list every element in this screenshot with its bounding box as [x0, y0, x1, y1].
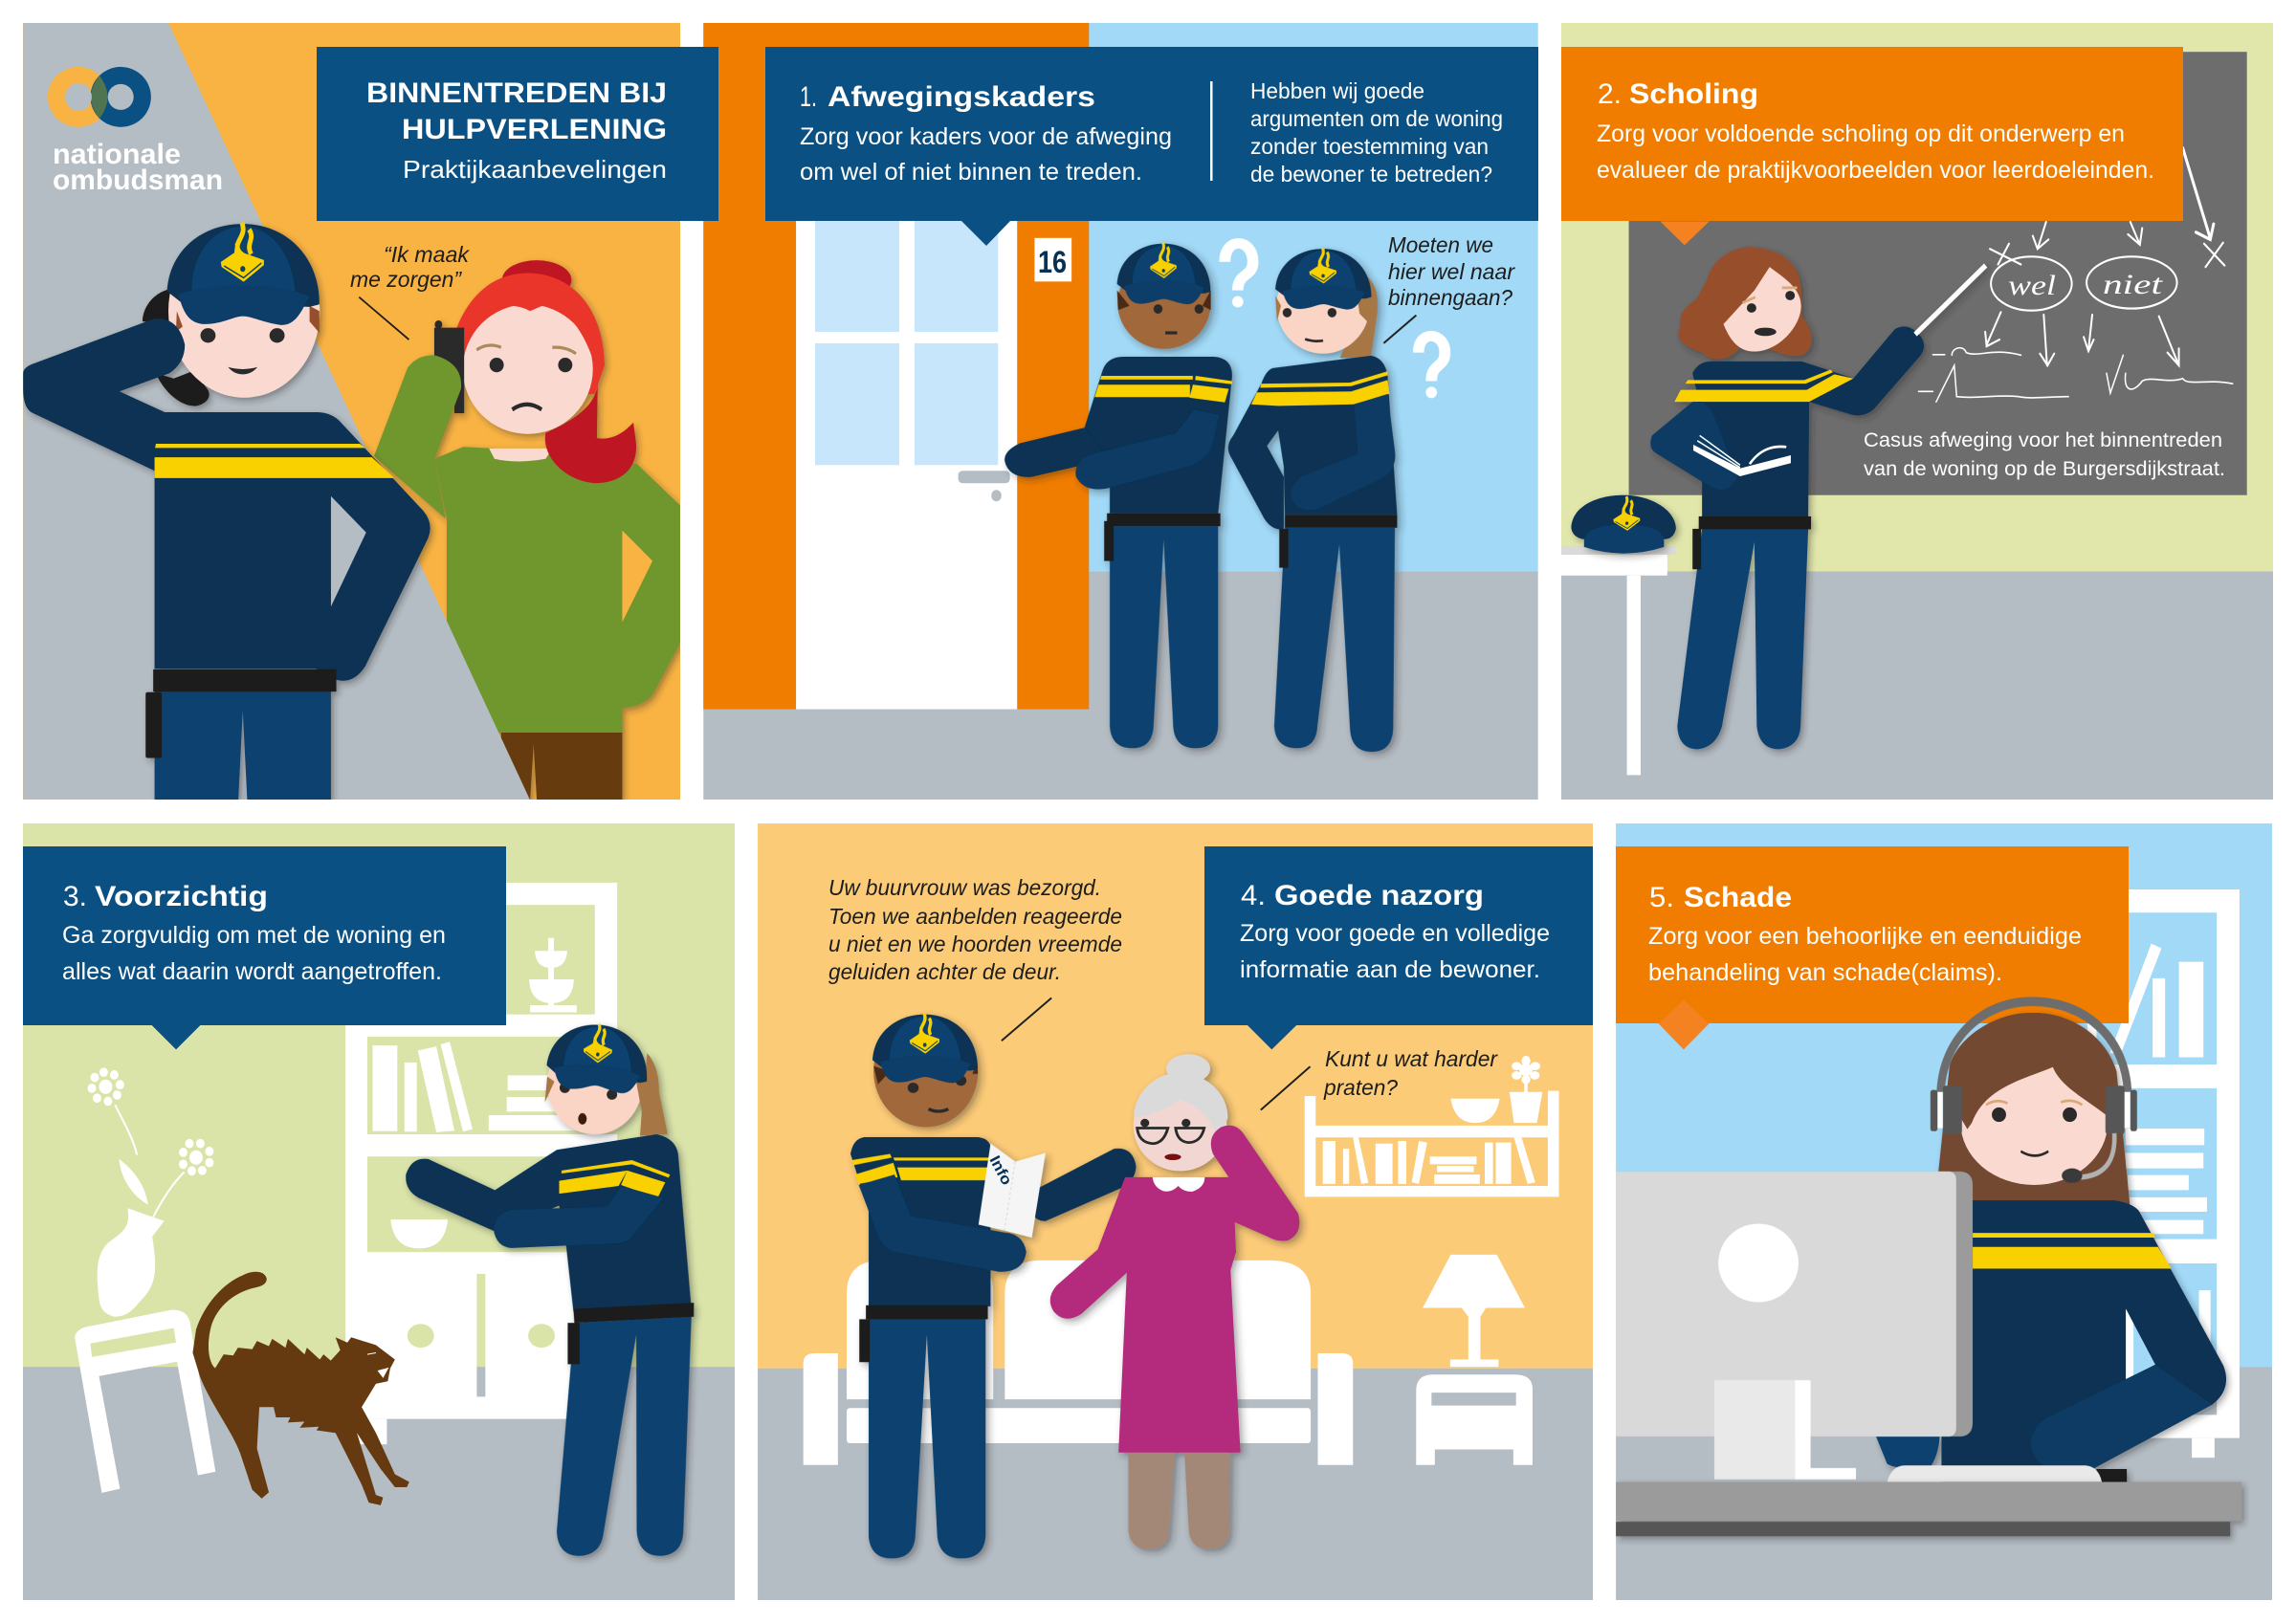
wall: [1616, 823, 2272, 1367]
panel 3: voorzichtig: [23, 823, 735, 1600]
officer with leaflet: [850, 1014, 1137, 1559]
number 2: 2.: [1598, 78, 1622, 110]
body 4: [1240, 920, 1550, 983]
scene 2: [1561, 23, 2273, 800]
divider: [1210, 81, 1213, 181]
speech pointer: [359, 297, 408, 340]
nightstand: [1416, 1374, 1533, 1465]
title text: BINNENTREDEN BIJ: [366, 77, 667, 109]
chalkboard caption: Casus afweging voor het binnentreden: [1864, 428, 2222, 451]
intro background: [23, 23, 680, 800]
teacher officer: [1650, 247, 1986, 749]
panel: intro: [23, 23, 680, 800]
call-centre officer: [1876, 1013, 2226, 1482]
keyboard: [1888, 1465, 2102, 1482]
panel 1: afwegingskaders: [703, 23, 1538, 800]
body 5: Zorg voor een behoorlijke en eenduidige: [1648, 923, 2082, 950]
scene 3: [23, 823, 735, 1600]
heading 1: Afwegingskaders: [828, 81, 1095, 113]
speech: officer explains: Uw buurvrouw was bezorgd.: [828, 875, 1101, 900]
tail of banner 3: [151, 1024, 201, 1049]
banner 4 background: [1204, 846, 1593, 1025]
body 4: informatie aan de bewoner.: [1240, 956, 1540, 983]
scene 4: [758, 823, 1593, 1600]
wall shelf: [1305, 1056, 1559, 1196]
heading 3: Voorzichtig: [95, 881, 268, 912]
house number: 16: [1038, 245, 1067, 279]
body 2: [1597, 121, 2154, 184]
banner 1 background: [765, 47, 1538, 246]
chalk diagram: [1918, 147, 2233, 402]
banner 2: [1561, 47, 2183, 221]
grey wedge: [23, 23, 530, 800]
body 1: om wel of niet binnen te treden.: [800, 159, 1142, 186]
heading 4: Goede nazorg: [1274, 880, 1484, 911]
body 3: Ga zorgvuldig om met de woning en: [62, 922, 446, 949]
speech pointer officer: [1002, 998, 1051, 1041]
wall: [23, 823, 735, 1367]
tail of banner 5: [1659, 1000, 1709, 1049]
number 3: 3.: [63, 881, 87, 912]
body 2: Zorg voor voldoende scholing op dit onderwerp en: [1597, 121, 2125, 147]
headset: [1931, 1001, 2137, 1183]
speech: elderly woman: [1323, 1046, 1498, 1100]
officer with ponytail: [406, 1020, 694, 1556]
speech: elderly woman: Kunt u wat harder: [1325, 1046, 1498, 1071]
orange house wall: [703, 23, 1089, 710]
leaflet label: Info: [985, 1153, 1015, 1188]
body 2: evalueer de praktijkvoorbeelden voor leerdoeleinden.: [1597, 157, 2154, 184]
question text: zonder toestemming van: [1250, 134, 1489, 159]
body 3: alles wat daarin wordt aangetroffen.: [62, 958, 442, 985]
subtitle: Praktijkaanbevelingen: [403, 155, 667, 184]
speech: officer explains: Toen we aanbelden reageerde: [828, 904, 1122, 929]
elderly woman: [1050, 1054, 1299, 1549]
house number plate: [1034, 238, 1071, 281]
title banner: [317, 47, 718, 221]
floor: [758, 1369, 1593, 1600]
number 4: 4.: [1241, 880, 1266, 911]
heading 2: Scholing: [1629, 78, 1758, 110]
table: [1561, 546, 1676, 775]
logo: [48, 67, 151, 127]
number 5: 5.: [1649, 882, 1674, 913]
panel 4: goede nazorg: [758, 823, 1593, 1600]
floor: [1616, 1367, 2272, 1600]
sofa: [804, 1261, 1353, 1465]
cat: [192, 1272, 409, 1505]
speech: officer explains: [828, 875, 1122, 984]
officer with ponytail: [1228, 248, 1397, 752]
speech: officer question: Moeten we: [1388, 232, 1493, 257]
speech: worried neighbour: “Ik maak: [384, 242, 470, 267]
wall: [758, 823, 1593, 1369]
question mark 2: [1419, 336, 1445, 398]
logo wordmark: nationale: [53, 139, 181, 170]
body 5: behandeling van schade(claims).: [1648, 959, 2002, 986]
floor: [23, 1367, 735, 1600]
police officer on phone: [23, 223, 430, 800]
speech: officer explains: u niet en we hoorden vreemde: [828, 932, 1122, 956]
banner 2 background: [1561, 47, 2183, 221]
bookcase: [345, 883, 617, 1444]
police hat on table: [1571, 495, 1676, 554]
scene 5 foreground: [1616, 1000, 2241, 1536]
panel 5: schade: [1616, 823, 2272, 1600]
chalk word niet: niet: [2103, 269, 2163, 300]
body 4: Zorg voor goede en volledige: [1240, 920, 1550, 947]
number 1: 1.: [800, 81, 817, 113]
question mark 1: [1225, 243, 1253, 307]
officer with dark skin: [1004, 243, 1232, 748]
woman on phone: [23, 23, 680, 800]
speech: officer question: hier wel naar: [1388, 259, 1515, 284]
tail of banner 2: [1660, 221, 1710, 245]
chalkboard caption: van de woning op de Burgersdijkstraat.: [1864, 457, 2225, 480]
desk: [1616, 1482, 2241, 1536]
chalkboard caption: [1864, 428, 2225, 480]
tail of banner 4: [1247, 1024, 1297, 1049]
body 1: [800, 123, 1172, 186]
wall: [1561, 23, 2273, 571]
question text: [1250, 78, 1503, 186]
door: [796, 221, 1018, 710]
banner 3 background: [23, 846, 506, 1025]
question text: argumenten om de woning: [1250, 106, 1503, 131]
body 3: [62, 922, 446, 985]
bookcase: [2087, 889, 2240, 1458]
speech pointer: [1383, 316, 1416, 343]
chalkboard: [1629, 52, 2247, 495]
speech: officer question: binnengaan?: [1388, 285, 1512, 310]
panel 2: scholing: [1561, 23, 2273, 800]
logo wordmark: ombudsman: [53, 164, 223, 196]
banner 3: [23, 846, 506, 1025]
heading 5: Schade: [1684, 882, 1792, 913]
floor: [1561, 571, 2273, 800]
wall: [703, 23, 1538, 571]
flowers and vase: [88, 1067, 213, 1317]
speech: elderly woman: praten?: [1323, 1075, 1398, 1100]
banner 5 background: [1616, 846, 2129, 1023]
speech: officer explains: geluiden achter de deur.: [828, 959, 1061, 984]
question text: Hebben wij goede: [1250, 78, 1424, 103]
title banner background: [317, 47, 718, 221]
scene 1: [703, 23, 1538, 800]
woman figure: [374, 260, 680, 800]
scene 5 background: [1616, 823, 2272, 1600]
monitor: [1616, 1172, 1973, 1480]
floor: [703, 571, 1538, 800]
body 1: Zorg voor kaders voor de afweging: [800, 123, 1172, 150]
speech pointer woman: [1261, 1066, 1310, 1110]
stool: [75, 1310, 215, 1493]
banner 4: [1204, 846, 1593, 1025]
logo wordmark: [54, 143, 222, 189]
speech: worried neighbour: me zorgen”: [350, 267, 462, 292]
speech: worried neighbour: [350, 242, 470, 292]
chalk word wel: wel: [2008, 270, 2056, 301]
body 5: [1648, 923, 2082, 986]
speech: officer question: [1388, 232, 1515, 310]
lamp: [1423, 1255, 1525, 1367]
title text line 2: HULPVERLENING: [402, 114, 667, 145]
question text: de bewoner te betreden?: [1250, 162, 1492, 186]
banner 1: [765, 47, 1538, 246]
